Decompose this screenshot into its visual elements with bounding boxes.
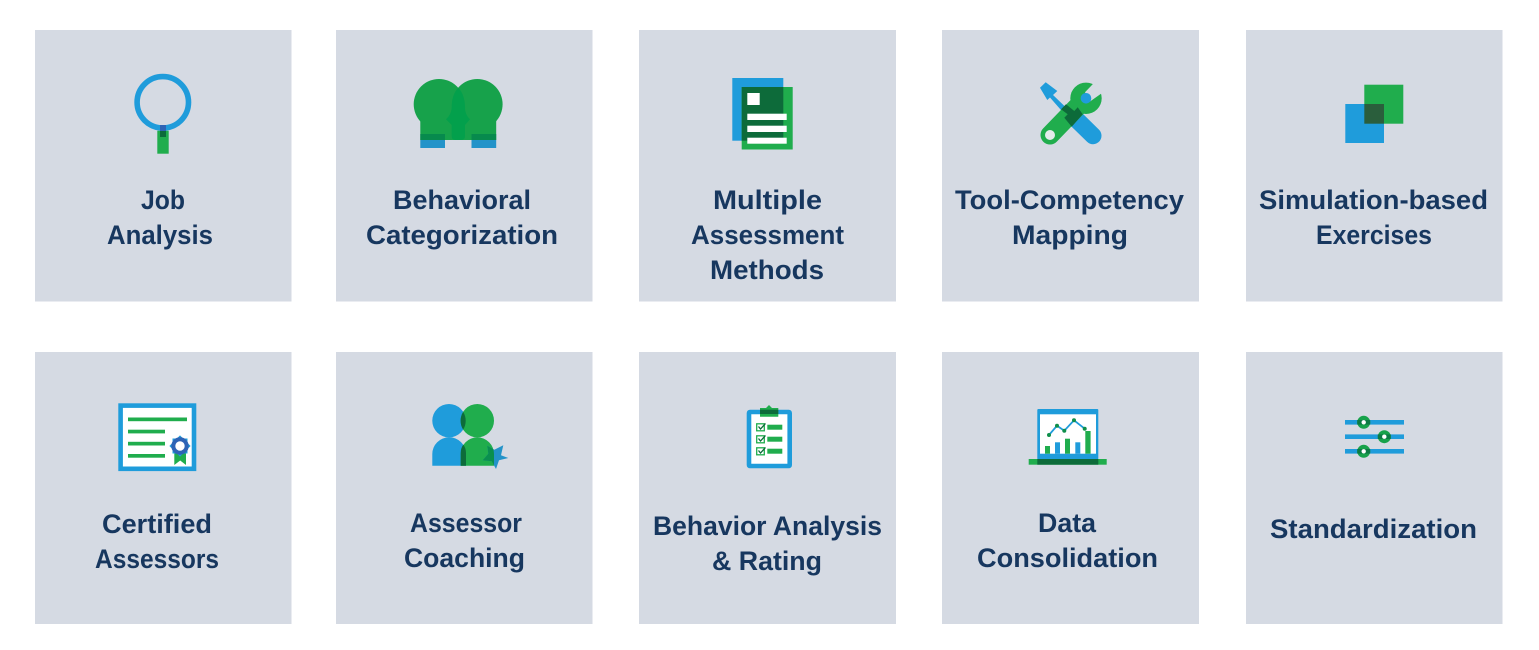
icon: laptop with chart (1029, 409, 1107, 465)
heading: Tool-Competency Mapping: Tool-Competency (955, 185, 1184, 215)
heading: Job Analysis (107, 185, 213, 250)
heading: Certified Assessors: Assessors (95, 544, 219, 574)
heading: Behavioral Categorization: Behavioral (393, 185, 531, 215)
panel: Job Analysis (35, 30, 292, 302)
heading: Certified Assessors: Certified (102, 509, 212, 539)
heading: Simulation-based Exercises: Simulation-based (1259, 185, 1488, 215)
icon: overlapping squares (1345, 85, 1403, 143)
panel: Tool-Competency Mapping (942, 30, 1199, 302)
panel: Behavior Analysis & Rating (639, 352, 896, 624)
heading: Behavioral Categorization (366, 185, 558, 250)
icon: clipboard checklist (749, 405, 790, 466)
icon: overlapping documents (732, 78, 793, 150)
icon: crossed screwdriver and wrench (1040, 77, 1108, 140)
panel: Data Consolidation (942, 352, 1199, 624)
heading: Simulation-based Exercises (1259, 185, 1488, 250)
heading: Multiple Assessment Methods: Assessment (691, 220, 844, 250)
heading: Behavioral Categorization: Categorization (366, 220, 558, 250)
heading: Tool-Competency Mapping: Mapping (1012, 220, 1128, 250)
icon: certificate with seal (121, 406, 194, 469)
panel: Multiple Assessment Methods (639, 30, 896, 302)
heading: Assessor Coaching: Coaching (404, 543, 525, 573)
heading: Simulation-based Exercises: Exercises (1316, 220, 1432, 250)
heading: Data Consolidation (977, 508, 1158, 573)
heading: Certified Assessors (95, 509, 219, 574)
heading: Behavior Analysis & Rating (653, 511, 882, 576)
heading: Data Consolidation: Consolidation (977, 543, 1158, 573)
heading: Multiple Assessment Methods: Multiple (713, 185, 822, 215)
panel: Behavioral Categorization (336, 30, 592, 302)
heading: Behavior Analysis & Rating: Behavior Analysis (653, 511, 882, 541)
heading: Behavior Analysis & Rating: & Rating (712, 546, 822, 576)
panel: Assessor Coaching (336, 352, 592, 624)
heading: Multiple Assessment Methods: Methods (710, 255, 824, 285)
panel: Standardization (1246, 352, 1502, 624)
heading: Data Consolidation: Data (1038, 508, 1097, 538)
heading: Assessor Coaching (404, 508, 525, 573)
heading: Job Analysis: Analysis (107, 220, 213, 250)
icon: sliders (1345, 416, 1404, 458)
icon: magnifying glass (137, 77, 188, 154)
heading: Assessor Coaching: Assessor (410, 508, 522, 538)
panel: Certified Assessors (35, 352, 292, 624)
heading: Multiple Assessment Methods (691, 185, 844, 285)
heading: Job Analysis: Job (141, 185, 185, 215)
heading: Tool-Competency Mapping (955, 185, 1184, 250)
icon: two facing heads (414, 79, 503, 148)
heading: Standardization: Standardization (1270, 514, 1477, 544)
panel: Simulation-based Exercises (1246, 30, 1502, 302)
icon: two people with star (432, 404, 508, 469)
